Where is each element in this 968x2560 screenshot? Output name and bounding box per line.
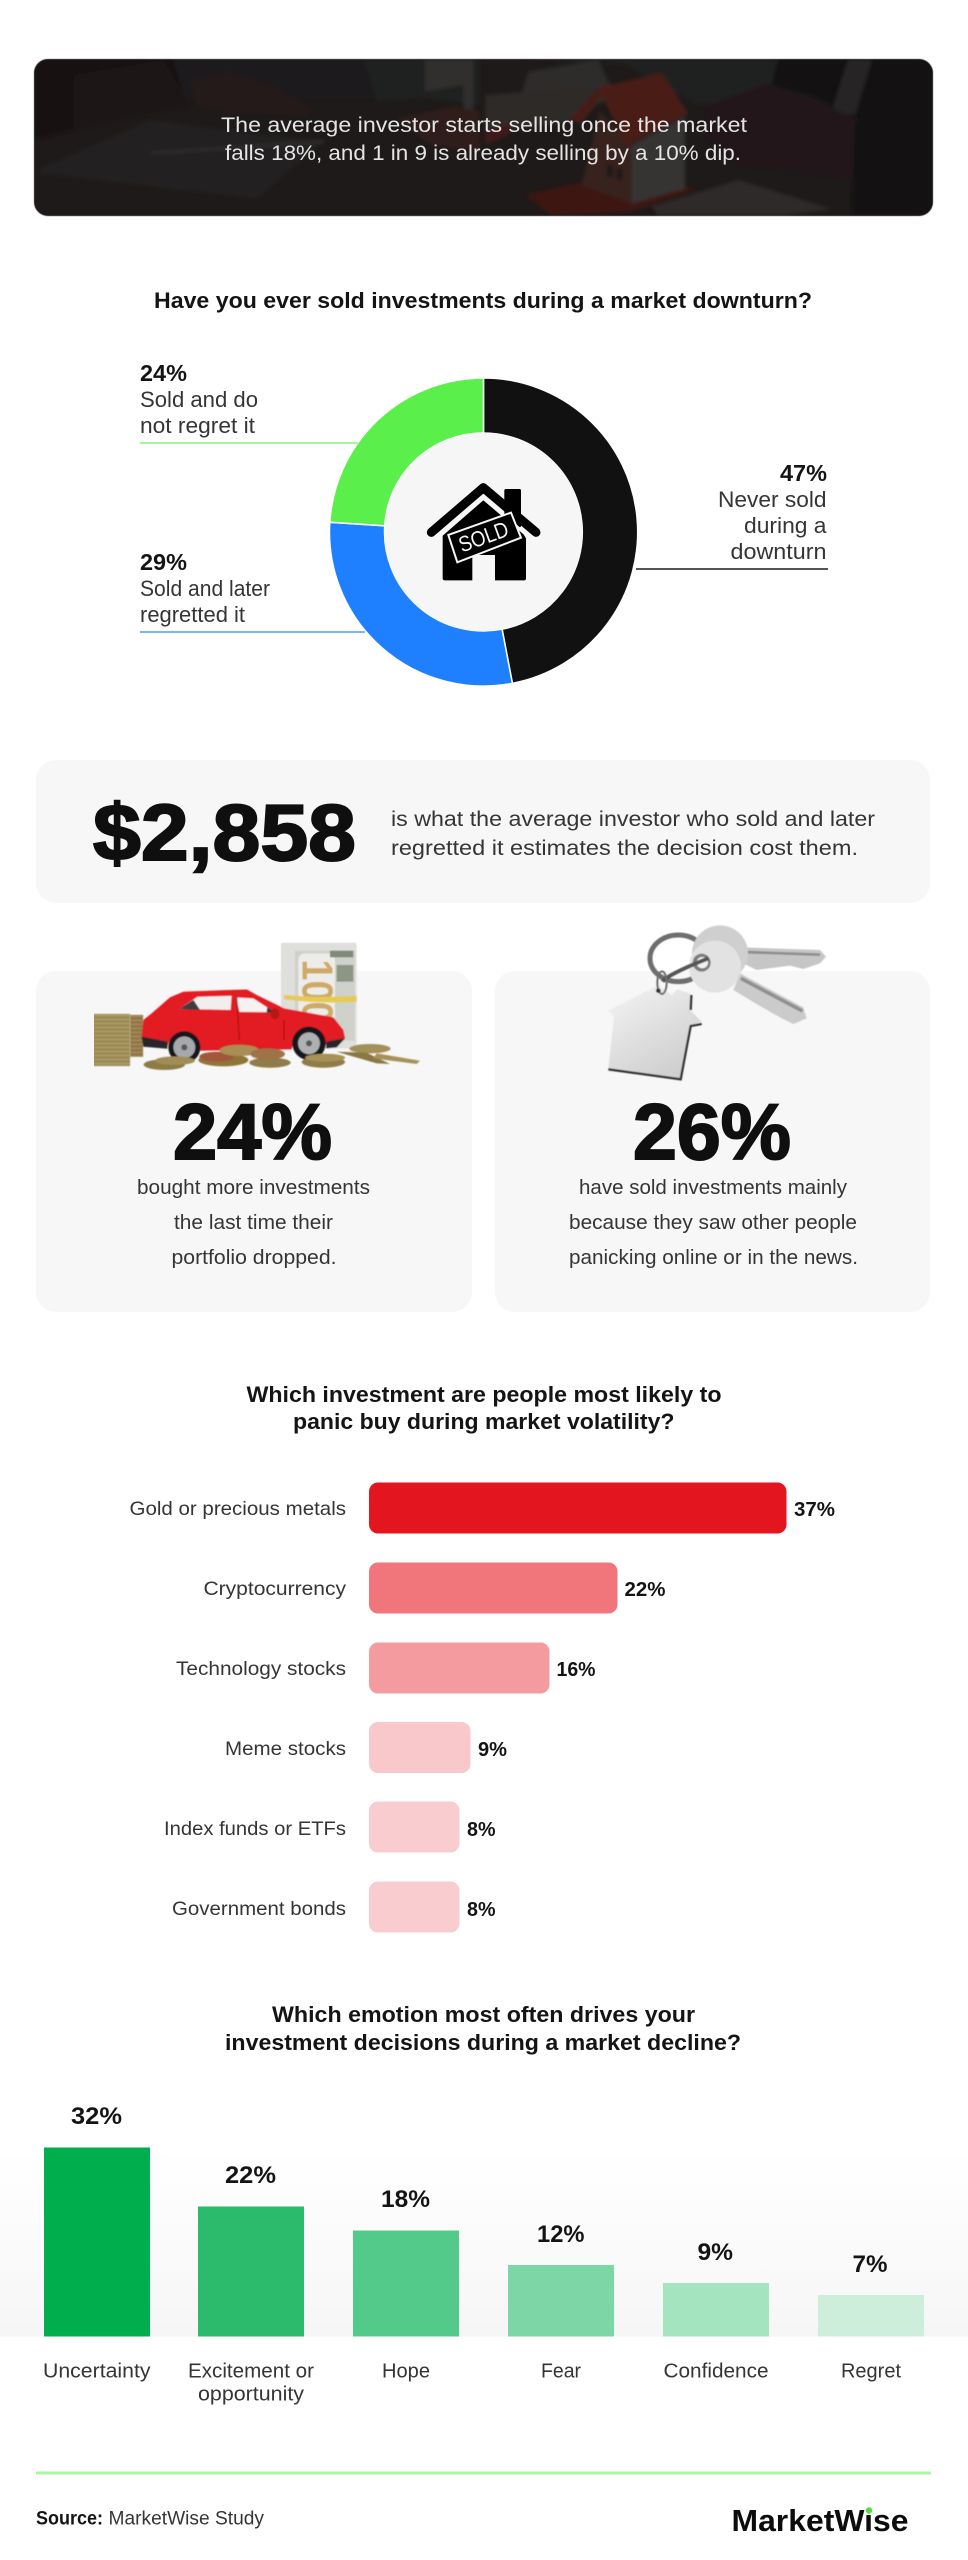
heading: panic buy question — [246, 1382, 722, 1434]
callout description — [391, 807, 875, 860]
column: excitement or opportunity 22%: Excitement or — [188, 2360, 314, 2382]
icon: sold house: SOLD — [455, 516, 512, 557]
stat description: bought more: the last time their — [174, 1211, 333, 1234]
stat description: bought more: portfolio dropped. — [172, 1246, 336, 1269]
banner text: The average investor starts selling once the market — [221, 113, 747, 137]
label: 47% never sold during a downturn — [636, 460, 828, 570]
icon: sold house — [431, 488, 536, 580]
panel: sold due to panic — [495, 925, 930, 1312]
donut centre — [384, 433, 582, 631]
bar: index funds or ETFs 8% — [164, 1802, 496, 1852]
stat: 26%: 26% — [633, 1087, 791, 1176]
bar: gold or precious metals 37%: 37% — [794, 1498, 835, 1521]
column: confidence 9% — [663, 2239, 769, 2382]
bar: index funds or ETFs 8%: Index funds or ETFs — [164, 1818, 346, 1840]
heading: emotion question: Which emotion most often drives your — [272, 2002, 695, 2027]
segment: sold and regretted 29% — [329, 522, 512, 686]
source line — [36, 2508, 264, 2530]
panel: photo banner — [33, 58, 935, 216]
bar: cryptocurrency 22% — [204, 1562, 666, 1614]
bar: government bonds 8%: Government bonds — [172, 1898, 346, 1920]
column: regret 7% — [818, 2251, 924, 2382]
bar: meme stocks 9%: 9% — [478, 1738, 507, 1761]
bar: meme stocks 9%: Meme stocks — [225, 1738, 346, 1760]
bar: technology stocks 16% — [176, 1642, 596, 1694]
panel: bought more investments — [36, 943, 472, 1312]
column: uncertainty 32% — [43, 2103, 150, 2382]
horizontal bar chart: panic buying — [130, 1482, 835, 1932]
bar: meme stocks 9% — [225, 1722, 507, 1773]
panel: $2,858 cost callout — [36, 760, 930, 903]
source line: MarketWise Study — [108, 2508, 264, 2530]
bar: government bonds 8%: 8% — [467, 1898, 496, 1921]
banner text: falls 18%, and 1 in 9 is already selling by a 10% dip. — [225, 141, 741, 165]
label: 29% sold and later regretted it: Sold and later — [140, 576, 270, 601]
stat description: sold from panic: because they saw other people — [569, 1211, 857, 1234]
column: excitement or opportunity 22%: 22% — [225, 2162, 276, 2189]
heading: emotion question: investment decisions during a market decline? — [225, 2030, 741, 2055]
heading: panic buy question: panic buy during market volatility? — [293, 1409, 674, 1434]
callout description: is what the average investor who sold and later — [391, 807, 875, 831]
column: excitement or opportunity 22% — [188, 2162, 314, 2406]
source line: Source: — [36, 2508, 103, 2530]
stat description: bought more: bought more investments — [137, 1176, 370, 1199]
label: 24% sold and do not regret it: 24% — [140, 360, 187, 386]
bar: index funds or ETFs 8%: 8% — [467, 1818, 496, 1841]
column: fear 12% — [508, 2221, 614, 2382]
column: confidence 9%: 9% — [698, 2239, 733, 2266]
column: uncertainty 32%: Uncertainty — [43, 2360, 150, 2382]
column: confidence 9%: Confidence — [664, 2360, 768, 2382]
heading: panic buy question: Which investment are people most likely to — [246, 1382, 722, 1407]
heading: emotion question — [225, 2002, 741, 2055]
logo: MarketWise: MarketWise — [732, 2503, 908, 2538]
stat description: sold from panic — [569, 1176, 858, 1269]
column chart: emotions — [0, 2103, 968, 2406]
column: hope 18% — [353, 2186, 459, 2382]
column: fear 12%: 12% — [537, 2221, 585, 2248]
stat description: sold from panic: have sold investments mainly — [579, 1176, 848, 1199]
stat: $2,858: $2,858 — [93, 788, 356, 877]
label: 24% sold and do not regret it — [140, 360, 358, 444]
bar: technology stocks 16%: Technology stocks — [176, 1658, 346, 1680]
column: hope 18%: 18% — [381, 2186, 430, 2213]
bar: cryptocurrency 22%: 22% — [624, 1578, 666, 1601]
column: hope 18%: Hope — [382, 2360, 430, 2382]
label: 47% never sold during a downturn: downturn — [730, 539, 826, 564]
column: excitement or opportunity 22%: opportunity — [198, 2384, 304, 2406]
segment: sold no regret 24% — [330, 378, 484, 526]
label: 24% sold and do not regret it: Sold and do — [140, 387, 258, 412]
bar: gold or precious metals 37% — [130, 1482, 835, 1534]
label: 29% sold and later regretted it: regretted it — [140, 602, 246, 627]
column: regret 7%: 7% — [852, 2251, 888, 2278]
bar: government bonds 8% — [172, 1882, 496, 1932]
stat description: sold from panic: panicking online or in the news. — [569, 1246, 858, 1269]
bar: gold or precious metals 37%: Gold or precious metals — [130, 1498, 346, 1520]
image: house keychain with keys — [608, 925, 826, 1079]
label: 29% sold and later regretted it: 29% — [140, 549, 187, 575]
label: 29% sold and later regretted it — [140, 549, 365, 633]
bar: technology stocks 16%: 16% — [556, 1658, 596, 1681]
label: 47% never sold during a downturn: 47% — [780, 460, 827, 486]
label: 47% never sold during a downturn: Never sold — [718, 487, 826, 512]
banner text — [221, 113, 747, 165]
label: 24% sold and do not regret it: not regret it — [140, 413, 256, 438]
heading: sold investments question: Have you ever sold investments during a market downturn? — [154, 288, 812, 313]
image: red car with coins and cash: 100 — [293, 959, 341, 1023]
stat description: bought more — [137, 1176, 370, 1269]
donut chart — [329, 378, 638, 686]
column: uncertainty 32%: 32% — [71, 2103, 122, 2130]
stat: 24%: 24% — [173, 1087, 332, 1176]
label: 47% never sold during a downturn: during a — [744, 513, 827, 538]
segment: never sold 47% — [484, 378, 638, 683]
column: regret 7%: Regret — [841, 2360, 901, 2382]
column: fear 12%: Fear — [541, 2360, 581, 2382]
image: red car with coins and cash — [110, 943, 420, 1070]
bar: cryptocurrency 22%: Cryptocurrency — [204, 1578, 346, 1600]
callout description: regretted it estimates the decision cost them. — [391, 836, 858, 860]
